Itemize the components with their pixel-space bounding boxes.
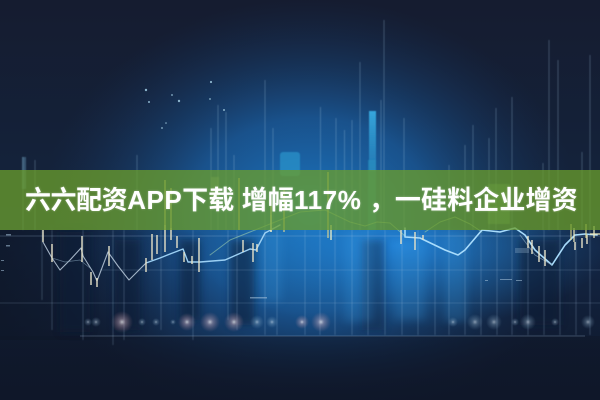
glowing blue columns xyxy=(22,111,510,230)
dark building blocks in lower chart xyxy=(60,232,560,332)
star dots xyxy=(145,81,225,129)
small data ticks at left edge xyxy=(1,234,529,298)
glowing orbs row xyxy=(84,311,595,333)
vertical light lines, upper area xyxy=(23,20,590,230)
line chart: white zigzag, left xyxy=(43,210,482,281)
title: 六六配资APP下载 增幅117% ，一硅料企业增资 xyxy=(25,185,578,215)
horizontal grid lines xyxy=(0,236,600,336)
green title band xyxy=(0,170,600,230)
line chart: bright blue, right xyxy=(405,228,597,265)
lower chart vertical grid lines xyxy=(42,230,590,345)
candlesticks xyxy=(43,172,600,287)
